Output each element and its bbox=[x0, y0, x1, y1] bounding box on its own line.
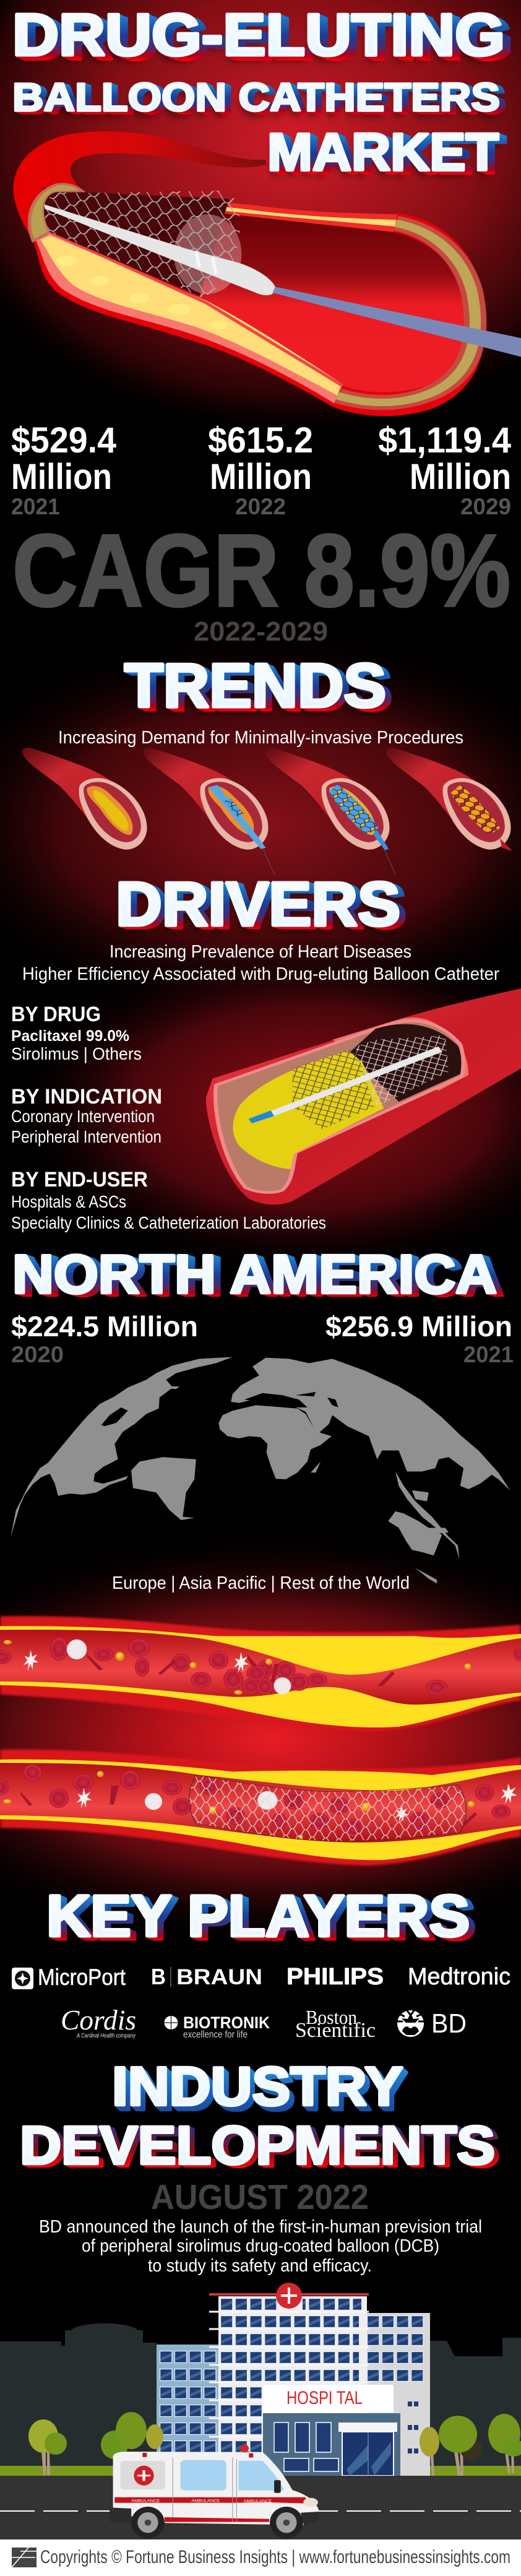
side window bbox=[181, 2460, 226, 2491]
heading: developments: DEVELOPMENTS bbox=[24, 2117, 499, 2177]
upper plaque bbox=[0, 1626, 521, 1675]
heading: key players: KEY PLAYERS bbox=[47, 1888, 471, 1954]
segment: by end-user bbox=[11, 1168, 326, 1232]
heading: key players: KEY PLAYERS bbox=[50, 1885, 473, 1951]
heading: drivers: DRIVERS bbox=[122, 872, 407, 941]
artery outer wall bbox=[206, 988, 521, 1204]
yellow plaque bbox=[233, 1051, 384, 1169]
title: market: MARKET bbox=[269, 129, 500, 188]
heading: developments: DEVELOPMENTS bbox=[22, 2117, 497, 2177]
rod-shaped cells bbox=[87, 1654, 395, 1687]
vessel stage 2: balloon insertion bbox=[144, 747, 275, 875]
title: balloon catheters: BALLOON CATHETERS bbox=[17, 77, 504, 121]
main block bbox=[218, 2296, 367, 2476]
heading: trends: TRENDS bbox=[124, 651, 386, 720]
heading: trends: TRENDS bbox=[131, 654, 392, 724]
lower centre windows bbox=[220, 2387, 264, 2458]
medical cross bbox=[134, 2466, 154, 2486]
heading: north america: NORTH AMERICA bbox=[20, 1246, 504, 1307]
red blood cells bbox=[0, 1637, 521, 1695]
red blood cells bbox=[0, 1765, 510, 1837]
top floor windows bbox=[220, 2298, 361, 2310]
blocked artery outer glow bbox=[0, 1616, 521, 1731]
heading: developments: DEVELOPMENTS bbox=[20, 2116, 495, 2176]
illustration: artery with stent and balloon catheter bbox=[13, 131, 521, 416]
title: market: MARKET bbox=[275, 126, 506, 185]
development description: BD announced the launch of the first-in-human prevision trial bbox=[39, 2217, 482, 2237]
entrance door bbox=[342, 2432, 394, 2476]
title: balloon catheters: BALLOON CATHETERS bbox=[19, 77, 506, 122]
vessel lower plaque band bbox=[33, 232, 342, 407]
stat: 2021 market value: 2021 bbox=[11, 494, 60, 519]
segment: by indication: BY INDICATION bbox=[11, 1085, 162, 1109]
development date: AUGUST 2022 bbox=[151, 2177, 369, 2217]
entrance windows bbox=[274, 2423, 338, 2471]
heading: key players: KEY PLAYERS bbox=[53, 1887, 476, 1952]
vessel lumen bbox=[50, 199, 470, 392]
world map bbox=[11, 1357, 510, 1583]
heading: north america: NORTH AMERICA bbox=[13, 1248, 499, 1310]
grass bbox=[0, 2466, 521, 2476]
heading: key players: KEY PLAYERS bbox=[48, 1884, 471, 1950]
ambulance lettering: AMBULANCE bbox=[131, 2498, 160, 2503]
logo: Biotronik: excellence for life bbox=[183, 2029, 248, 2040]
title: balloon catheters: BALLOON CATHETERS bbox=[12, 75, 500, 119]
illustration: four vessel stages bbox=[22, 747, 511, 875]
segment: by end-user: Specialty Clinics & Catheterization Laboratories bbox=[11, 1213, 326, 1232]
vessel stage 3: stent expansion bbox=[265, 747, 395, 875]
stat: 2022 market value: 2022 bbox=[235, 494, 286, 519]
stent mesh bbox=[45, 191, 240, 298]
artery back opening bbox=[332, 1018, 468, 1091]
heading: key players: KEY PLAYERS bbox=[46, 1883, 470, 1949]
hospital sign: HOSPI TAL bbox=[286, 2388, 363, 2408]
dark inner lumen bbox=[349, 1024, 462, 1102]
development description: of peripheral sirolimus drug-coated balloon (DCB) bbox=[82, 2236, 439, 2256]
title: balloon catheters: BALLOON CATHETERS bbox=[13, 80, 502, 125]
logo: Biotronik bbox=[165, 2013, 270, 2040]
segment: by end-user: BY END-USER bbox=[11, 1168, 148, 1191]
heading: trends: TRENDS bbox=[126, 652, 387, 721]
heading: developments: DEVELOPMENTS bbox=[21, 2116, 496, 2176]
stat: 2022 market value bbox=[208, 420, 313, 519]
title: drug-eluting: DRUG-ELUTING bbox=[14, 3, 506, 69]
title: market: MARKET bbox=[271, 125, 502, 184]
logo: MicroPort: MicroPort bbox=[38, 1964, 126, 1990]
stat: 2022 market value: Million bbox=[210, 457, 312, 497]
heading: industry: INDUSTRY bbox=[112, 2055, 403, 2117]
rod-shaped cells bbox=[20, 1786, 477, 1827]
heading: north america: NORTH AMERICA bbox=[17, 1245, 502, 1307]
drivers text: Increasing Prevalence of Heart Diseases bbox=[110, 942, 411, 962]
ambulance bbox=[110, 2445, 319, 2538]
heading: drivers: DRIVERS bbox=[119, 871, 403, 940]
stented artery outer glow bbox=[0, 1750, 521, 1865]
drivers text bbox=[22, 942, 499, 984]
left wing windows bbox=[160, 2351, 218, 2458]
lower plaque bbox=[0, 1815, 521, 1860]
ambulance lettering bbox=[131, 2498, 272, 2504]
vessel stage 1: plaque bbox=[22, 747, 147, 850]
segment: by drug: Sirolimus | Others bbox=[11, 1044, 142, 1063]
left wing bbox=[157, 2345, 218, 2476]
logo: BD: BD bbox=[431, 2008, 467, 2039]
vessel stage 4: deployed stent bbox=[386, 747, 511, 850]
stat: 2029 market value: $1,119.4 bbox=[378, 420, 511, 460]
vessel opening ring bbox=[29, 184, 230, 296]
centre windows bbox=[220, 2315, 359, 2387]
segment: by drug: Paclitaxel 99.0% bbox=[11, 1027, 129, 1045]
entrance awning bbox=[338, 2423, 397, 2432]
logo: Philips: PHILIPS bbox=[286, 1964, 384, 1990]
heading: drivers: DRIVERS bbox=[116, 870, 400, 939]
roof cross sign bbox=[276, 2283, 302, 2309]
cab window bbox=[239, 2461, 284, 2491]
roof bbox=[209, 2293, 369, 2296]
segment: by indication bbox=[11, 1085, 162, 1146]
catheter body bbox=[44, 204, 276, 295]
stat: 2029 market value bbox=[378, 420, 511, 519]
ambulance bumpers bbox=[110, 2507, 319, 2526]
heading: north america: NORTH AMERICA bbox=[14, 1244, 499, 1305]
logo: B Braun: BRAUN bbox=[176, 1965, 262, 1989]
heading: trends: TRENDS bbox=[127, 653, 389, 722]
platelets bbox=[24, 1650, 249, 1673]
heading: north america: NORTH AMERICA bbox=[12, 1243, 497, 1305]
north america 2020 value: 2020 bbox=[11, 1342, 64, 1367]
upper plaque bbox=[0, 1760, 521, 1791]
stat: 2029 market value: 2029 bbox=[460, 494, 511, 519]
north america 2021 value: 2021 bbox=[463, 1342, 514, 1367]
development description: to study its safety and efficacy. bbox=[148, 2256, 372, 2276]
entrance block bbox=[263, 2413, 400, 2476]
north america 2021 value bbox=[325, 1310, 514, 1367]
logo: B Braun: B bbox=[151, 1964, 166, 1989]
roof beacon bbox=[240, 2445, 249, 2452]
north america 2020 value bbox=[11, 1310, 198, 1367]
title: drug-eluting: DRUG-ELUTING bbox=[19, 6, 511, 72]
segment: by drug bbox=[11, 1003, 142, 1063]
title: balloon catheters: BALLOON CATHETERS bbox=[14, 76, 501, 120]
rear wheel bbox=[131, 2507, 165, 2538]
logo: BD bbox=[397, 2008, 467, 2039]
hospital sign bbox=[263, 2385, 394, 2413]
heading: drivers: DRIVERS bbox=[117, 870, 402, 940]
vessel tail bbox=[13, 131, 266, 241]
vessel upper band bbox=[80, 194, 397, 232]
balloon bbox=[174, 214, 241, 294]
lower plaque bbox=[0, 1682, 521, 1727]
segment: by indication: Peripheral Intervention bbox=[11, 1127, 161, 1146]
inner catheter bbox=[269, 1047, 442, 1116]
heading: industry: INDUSTRY bbox=[113, 2057, 404, 2118]
lipid droplets bbox=[4, 1640, 471, 1695]
artery interior bbox=[215, 1021, 463, 1193]
lipid droplets bbox=[3, 1771, 475, 1839]
ambulance stripe bbox=[114, 2497, 306, 2522]
trees bbox=[28, 2412, 521, 2476]
catheter bands bbox=[196, 251, 216, 274]
stat: 2022 market value: $615.2 bbox=[208, 420, 313, 460]
ambulance lettering: AMBULANCE bbox=[191, 2498, 220, 2503]
stent bbox=[189, 1775, 467, 1841]
heading: industry: INDUSTRY bbox=[117, 2060, 408, 2122]
mirror bbox=[274, 2480, 281, 2493]
north america 2020 value: $224.5 Million bbox=[11, 1310, 198, 1342]
title: balloon catheters: BALLOON CATHETERS bbox=[15, 76, 503, 121]
other regions: Europe | Asia Pacific | Rest of the World bbox=[112, 1573, 410, 1593]
segment: by indication: Coronary Intervention bbox=[11, 1107, 155, 1126]
title: market: MARKET bbox=[267, 123, 499, 182]
segment: by end-user: Hospitals & ASCs bbox=[11, 1192, 126, 1211]
heading: drivers: DRIVERS bbox=[121, 871, 405, 941]
heading: key players: KEY PLAYERS bbox=[51, 1886, 475, 1951]
lattice stent over lumen bbox=[356, 1035, 449, 1106]
hospital building bbox=[157, 2283, 430, 2476]
stat: 2021 market value: Million bbox=[11, 457, 112, 497]
floor ledges bbox=[209, 2312, 369, 2437]
platelets bbox=[77, 1783, 517, 1823]
logo: Cordis: A Cardinal Health company bbox=[76, 2033, 136, 2039]
guide wire bbox=[272, 287, 521, 357]
heading: north america: NORTH AMERICA bbox=[16, 1245, 500, 1306]
logo: Boston Scientific: Scientific bbox=[295, 2019, 376, 2042]
title: drug-eluting: DRUG-ELUTING bbox=[12, 2, 505, 68]
title: market: MARKET bbox=[269, 124, 501, 183]
title: market: MARKET bbox=[273, 126, 504, 184]
logo: Medtronic: Medtronic bbox=[408, 1964, 510, 1990]
trends text: Increasing Demand for Minimally-invasive Procedures bbox=[58, 728, 463, 748]
right tower bbox=[365, 2313, 430, 2476]
title: drug-eluting: DRUG-ELUTING bbox=[14, 7, 506, 73]
heading: trends: TRENDS bbox=[129, 654, 391, 723]
right wing windows bbox=[367, 2315, 424, 2387]
vessel right wall bbox=[332, 214, 486, 416]
title: drug-eluting: DRUG-ELUTING bbox=[20, 6, 513, 72]
segment: by drug: BY DRUG bbox=[11, 1003, 101, 1026]
logo: Boston Scientific: Boston bbox=[306, 2006, 357, 2028]
lumen bbox=[0, 1763, 521, 1843]
road bbox=[0, 2476, 521, 2539]
stat: 2029 market value: Million bbox=[410, 457, 511, 497]
title: drug-eluting: DRUG-ELUTING bbox=[15, 4, 508, 70]
headlight bbox=[303, 2498, 318, 2507]
heading: industry: INDUSTRY bbox=[116, 2059, 407, 2120]
heading: drivers: DRIVERS bbox=[116, 875, 402, 944]
development description bbox=[39, 2217, 482, 2276]
logo: Cordis: Cordis bbox=[61, 2004, 136, 2036]
logo: Biotronik: BIOTRONIK bbox=[183, 2013, 270, 2032]
stat: 2021 market value bbox=[11, 420, 116, 519]
footer logo bbox=[12, 2548, 37, 2567]
lumen bbox=[0, 1630, 521, 1705]
rear panel bbox=[120, 2461, 165, 2489]
door lines bbox=[173, 2457, 236, 2522]
lattice stent over plaque bbox=[293, 1047, 376, 1130]
footer bar bbox=[0, 2539, 521, 2576]
drivers text: Higher Efficiency Associated with Drug-eluting Balloon Catheter bbox=[22, 964, 499, 984]
stat: CAGR period: 2022-2029 bbox=[194, 616, 328, 647]
logo: B Braun bbox=[151, 1964, 262, 1989]
illustration: blocked artery with blood cells bbox=[0, 1616, 521, 1731]
north america 2021 value: $256.9 Million bbox=[325, 1310, 512, 1342]
illustration: stented artery with blood cells bbox=[0, 1750, 521, 1865]
ambulance lettering: AMBULANCE bbox=[244, 2499, 272, 2504]
white blood cells bbox=[67, 1640, 291, 1694]
tower small windows bbox=[408, 2401, 418, 2453]
heading: industry: INDUSTRY bbox=[114, 2058, 405, 2119]
white blood cells bbox=[145, 1791, 277, 1810]
illustration: opened artery with plaque and stent bbox=[206, 988, 521, 1204]
city skyline bbox=[0, 2323, 521, 2476]
title: drug-eluting: DRUG-ELUTING bbox=[17, 4, 509, 71]
heading: trends: TRENDS bbox=[125, 656, 388, 725]
logo: Boston Scientific bbox=[295, 2006, 376, 2042]
front wheel bbox=[270, 2507, 303, 2538]
stat: 2021 market value: $529.4 bbox=[11, 420, 116, 460]
ambulance body bbox=[113, 2452, 319, 2525]
catheter blue tip bbox=[249, 1110, 274, 1123]
roof markers bbox=[142, 2453, 253, 2457]
heading: developments: DEVELOPMENTS bbox=[25, 2118, 500, 2178]
